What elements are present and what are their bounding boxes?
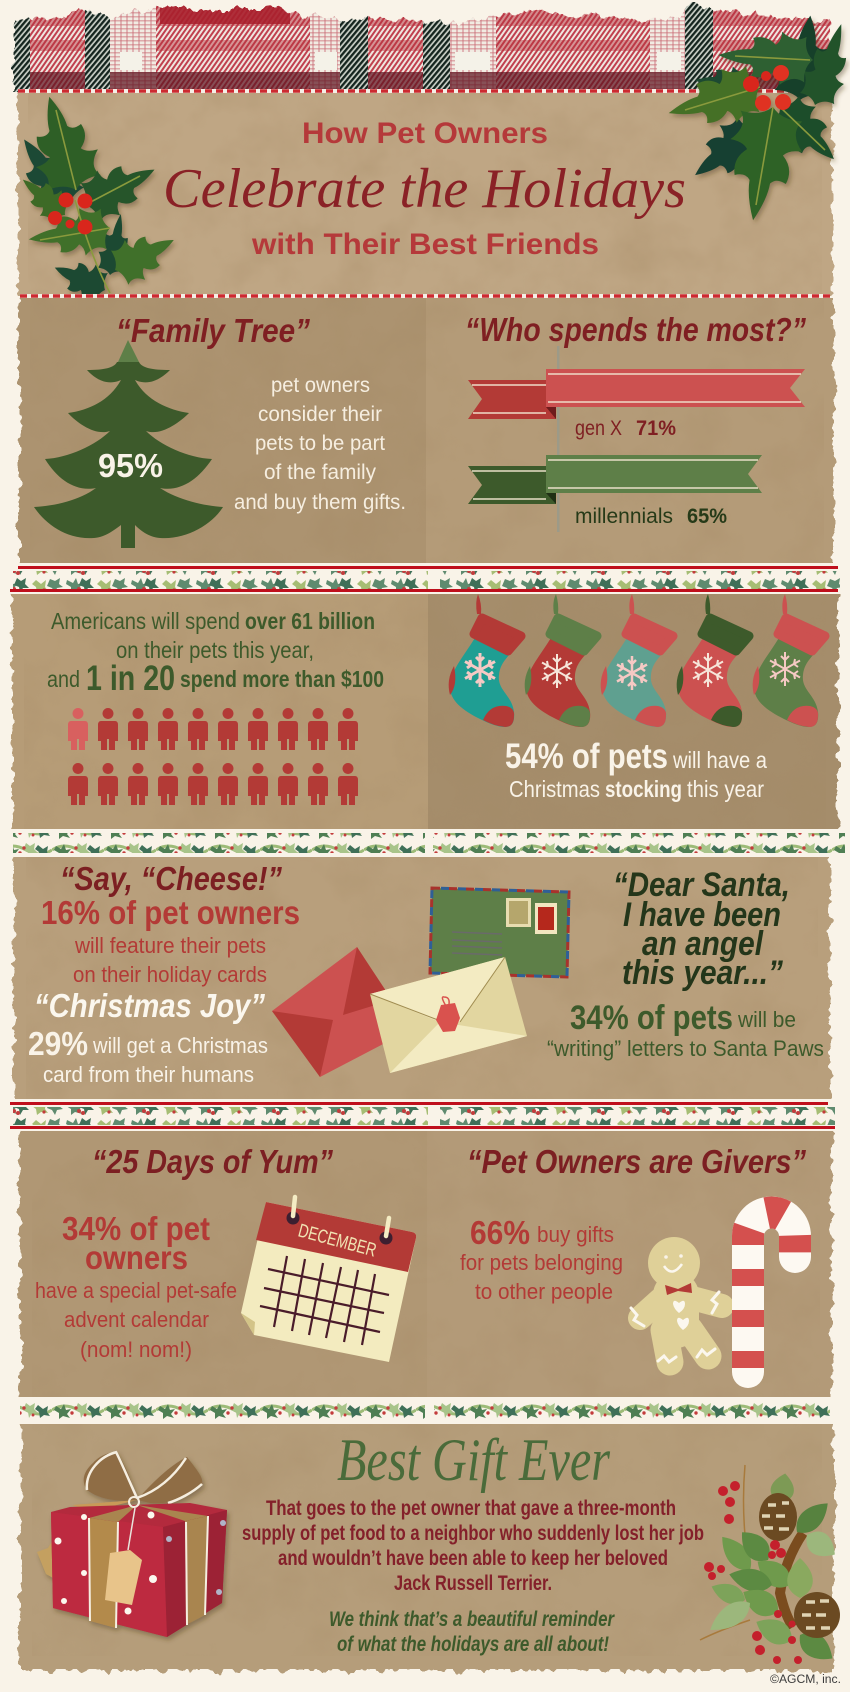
text: givers statistic [460, 1214, 623, 1304]
text: advent statistic: owners [85, 1239, 188, 1276]
icon: pine tree [34, 340, 223, 548]
text: closing reminder: of what the holidays are all about! [337, 1633, 609, 1656]
garland divider 1 [10, 566, 840, 592]
text: dear santa: an angel [642, 925, 764, 963]
title [163, 117, 686, 261]
text: say cheese: will feature their pets [74, 933, 266, 958]
icon: pinecones and berries [700, 1465, 842, 1668]
rope divider under header [20, 294, 830, 298]
text: family tree description: pets to be part [255, 432, 385, 455]
icon: holly left [3, 88, 184, 308]
panel: who spends the most [426, 298, 834, 563]
text: christmas joy: “Christmas Joy” [34, 987, 265, 1024]
text: spending statistic: Americans will spend [51, 608, 240, 634]
plaid banner [0, 0, 850, 96]
title: with Their Best Friends [251, 228, 599, 261]
heading: 25 days: “25 Days of Yum” [92, 1143, 333, 1180]
chart: millennials ribbon: millennials [575, 505, 673, 528]
panel: cards and letters [14, 857, 830, 1099]
panel: advent calendar [20, 1131, 427, 1397]
text: givers statistic: for pets belonging [460, 1250, 623, 1275]
text: givers statistic: buy gifts [537, 1222, 614, 1247]
panel: best gift ever [20, 1424, 842, 1670]
icon: calendar: DECEMBER [296, 1221, 379, 1262]
text: advent statistic: 34% of pet [62, 1210, 210, 1247]
panel: stockings [428, 594, 838, 829]
text: advent statistic: have a special pet-safe [35, 1278, 237, 1303]
garland divider 2 [13, 833, 845, 853]
text: closing reminder [329, 1608, 615, 1656]
icon: stocking 3 [601, 594, 673, 727]
text: best gift story: Jack Russell Terrier. [394, 1572, 552, 1595]
rope divider top [18, 89, 830, 93]
text: dear santa: 34% of pets [570, 999, 733, 1037]
text: family tree description: and buy them gifts. [234, 491, 406, 514]
text: spending statistic: spend more than $100 [180, 666, 384, 692]
text: advent statistic [35, 1210, 237, 1362]
icon: wrapped gift [37, 1452, 227, 1637]
text: christmas joy: 29% [28, 1025, 88, 1062]
text: spending statistic: on their pets this year, [116, 637, 314, 663]
title: Celebrate the Holidays [163, 158, 686, 220]
heading: givers: “Pet Owners are Givers” [467, 1143, 806, 1180]
text: family tree description: consider their [258, 403, 382, 426]
text: givers statistic: 66% [470, 1214, 530, 1251]
text: spending statistic: and [47, 666, 80, 692]
heading: best gift ever: Best Gift Ever [337, 1427, 611, 1493]
panel: header paper [18, 92, 832, 296]
text: stocking statistic: Christmas [509, 776, 600, 802]
text: spending statistic [47, 608, 384, 698]
text: spending statistic: over 61 billion [245, 608, 375, 634]
chart: gen X ribbon [468, 369, 805, 440]
icon: calendar [241, 1197, 416, 1362]
chart: gen X ribbon: gen X [575, 417, 622, 440]
text: closing reminder: We think that’s a beautiful reminder [329, 1608, 615, 1631]
garland divider 3 [10, 1102, 835, 1129]
text: dear santa: “writing” letters to Santa Paws [547, 1036, 824, 1061]
icon: holly right [661, 12, 850, 227]
text: advent statistic: (nom! nom!) [80, 1337, 192, 1362]
title: How Pet Owners [302, 117, 548, 150]
icon: gingerbread man [631, 1237, 722, 1362]
text: family tree description [234, 374, 406, 514]
text: say cheese: on their holiday cards [73, 962, 267, 987]
heading: who spends: “Who spends the most?” [465, 311, 806, 348]
chart: millennials ribbon [468, 455, 762, 528]
text: dear santa: will be [737, 1007, 796, 1032]
icon: stocking 1 [449, 594, 521, 727]
text: christmas joy: card from their humans [43, 1062, 254, 1087]
heading: family tree: “Family Tree” [116, 312, 310, 349]
text: givers statistic: to other people [475, 1279, 613, 1304]
icon: red envelope [272, 947, 410, 1077]
chart: gen X ribbon: 71% [636, 417, 676, 440]
text: advent statistic: advent calendar [64, 1307, 209, 1332]
text: say cheese [41, 860, 300, 987]
text: best gift story: supply of pet food to a neighbor who suddenly lost her job [242, 1522, 704, 1545]
icon: stocking 2 [525, 594, 597, 727]
text: stocking statistic [505, 737, 767, 802]
chart: millennials ribbon: 65% [687, 505, 727, 528]
text: best gift story: and wouldn’t have been able to keep her beloved [278, 1547, 668, 1570]
text: family tree description: pet owners [271, 374, 370, 397]
text: best gift story: That goes to the pet owner that gave a three-month [266, 1497, 676, 1520]
text: say cheese: 16% of pet owners [41, 894, 300, 931]
icon: stocking 5 [753, 594, 825, 727]
text: stocking statistic: stocking [605, 776, 682, 802]
text: say cheese: “Say, “Cheese!” [60, 860, 282, 897]
icon: candy cane [748, 1213, 795, 1372]
text: dear santa: “Dear Santa, [613, 866, 790, 904]
text: stocking statistic: will have a [672, 747, 767, 773]
text: stocking statistic: this year [687, 776, 764, 802]
text: christmas joy [28, 987, 268, 1087]
panel: family tree [19, 298, 426, 563]
icon: green airmail envelope [430, 888, 569, 977]
garland divider 4 [20, 1401, 830, 1421]
copyright credit: ©AGCM, inc. [770, 1674, 841, 1686]
panel: pet owners are givers [427, 1131, 832, 1397]
text: dear santa: I have been [623, 896, 781, 934]
icon: cream envelope with wax seal [370, 957, 527, 1073]
text: family tree description: of the family [264, 461, 376, 484]
text: christmas joy: will get a Christmas [92, 1033, 268, 1058]
text: best gift story [242, 1497, 704, 1595]
icon: pine tree: 95% [98, 447, 163, 484]
icon grid: people one in twenty [68, 708, 358, 805]
text: spending statistic: 1 in 20 [86, 659, 175, 698]
text: dear santa [547, 866, 824, 1061]
icon: stocking 4 [677, 594, 749, 727]
panel: spending and people [12, 594, 428, 829]
text: dear santa: this year...” [622, 954, 783, 992]
text: stocking statistic: 54% of pets [505, 737, 668, 776]
